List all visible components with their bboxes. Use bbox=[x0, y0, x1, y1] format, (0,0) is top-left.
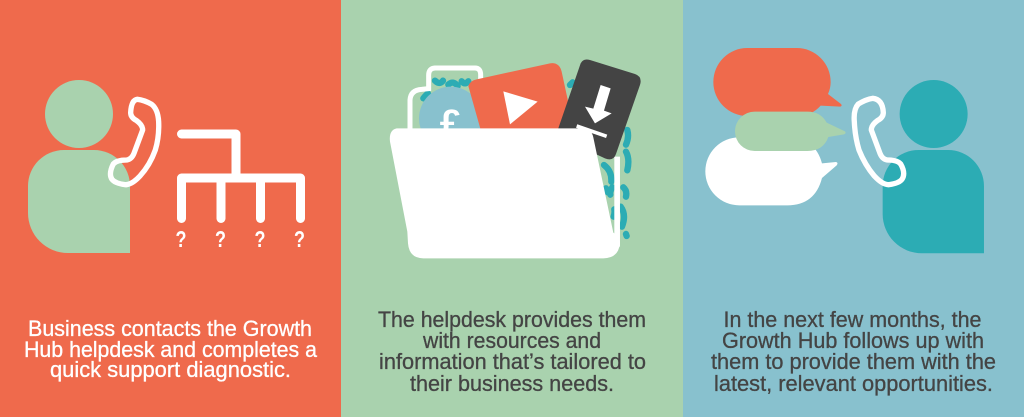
panel: step 2 resources bbox=[341, 0, 683, 417]
text: step 3 description: Growth Hub follows up with bbox=[722, 328, 984, 353]
icon: white speech bubble bbox=[705, 137, 838, 205]
text: step 3 description: latest, relevant opportunities. bbox=[714, 371, 993, 396]
text: step 3 description: In the next few months, the bbox=[724, 307, 982, 332]
question marks bbox=[176, 226, 305, 252]
video card bbox=[468, 63, 575, 133]
folder front bbox=[390, 128, 620, 258]
text: step 2 description bbox=[378, 307, 646, 396]
text: step 1 description bbox=[24, 316, 318, 382]
question marks: ? bbox=[215, 226, 226, 252]
text: step 2 description: information that’s tailored to bbox=[379, 349, 646, 374]
coin: pound bbox=[419, 87, 482, 150]
icon: green speech bubble bbox=[735, 112, 846, 151]
download card bbox=[558, 59, 641, 159]
text: step 3 description bbox=[711, 307, 996, 396]
coin: pound: £ bbox=[440, 102, 462, 146]
text: step 2 description: their business needs. bbox=[410, 371, 614, 396]
text: step 3 description: them to provide them with the bbox=[711, 349, 996, 374]
text: step 1 description: Business contacts the Growth bbox=[28, 316, 312, 341]
text: step 2 description: The helpdesk provides them bbox=[378, 307, 646, 332]
folder back with pattern bbox=[423, 81, 628, 236]
question marks: ? bbox=[294, 226, 305, 252]
text: step 1 description: Hub helpdesk and completes a bbox=[24, 337, 318, 362]
panel: step 3 follow up bbox=[683, 0, 1024, 417]
question marks: ? bbox=[176, 226, 186, 252]
text: step 2 description: with resources and bbox=[422, 328, 601, 353]
icon: person on phone bbox=[28, 80, 159, 253]
panel: step 1 contact bbox=[0, 0, 341, 417]
right paper edge bbox=[614, 157, 620, 247]
icon: folder of resources bbox=[390, 59, 641, 258]
icon: branching diagram bbox=[182, 134, 300, 218]
icon: orange speech bubble bbox=[713, 48, 842, 116]
text: step 1 description: quick support diagnostic. bbox=[50, 357, 291, 382]
question marks: ? bbox=[254, 226, 266, 252]
back folder outline bbox=[410, 68, 481, 130]
icon: person on phone bbox=[854, 80, 984, 253]
